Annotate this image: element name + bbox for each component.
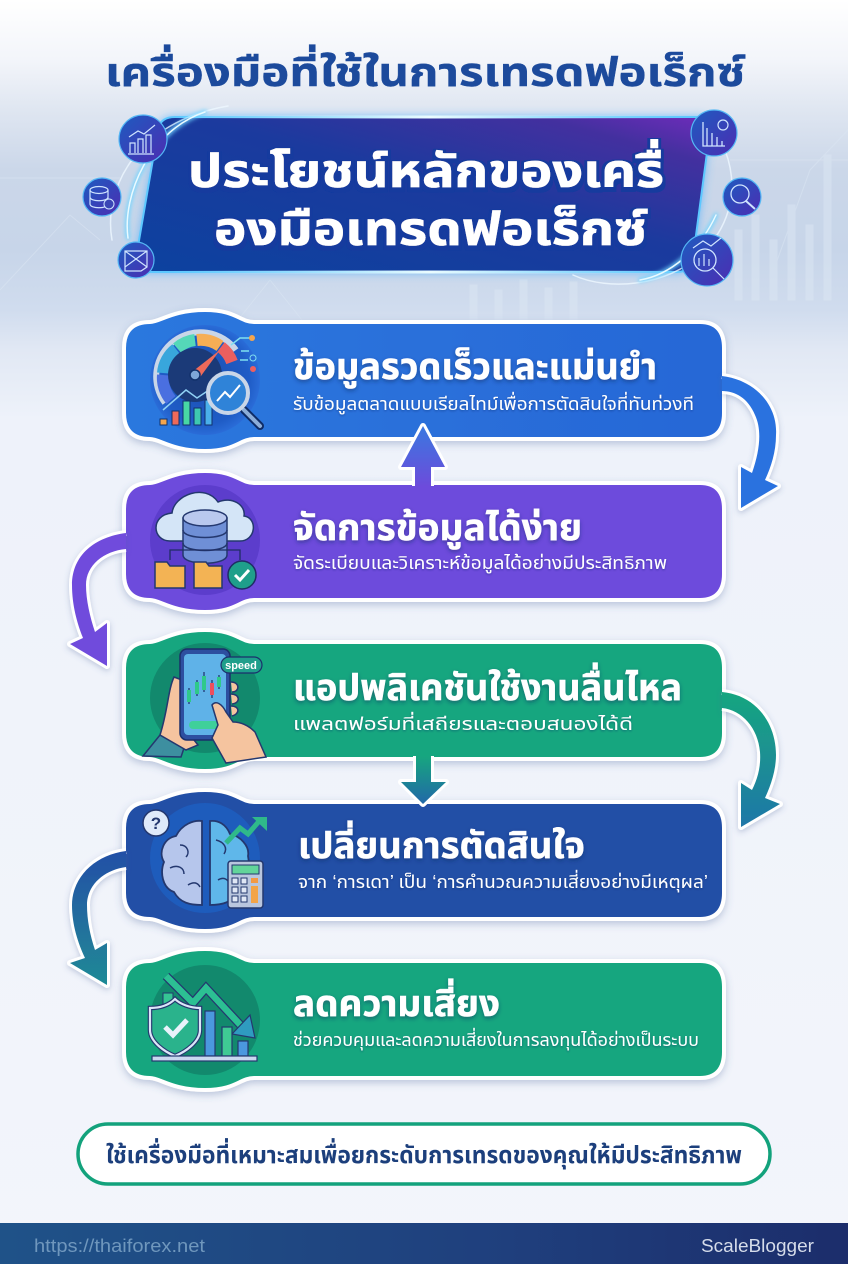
banner glow rings bbox=[111, 106, 732, 284]
banner heading line 2: องมือเทรดฟอเร็กซ์ bbox=[214, 203, 648, 255]
callout text: ใช้เครื่องมือที่เหมาะสมเพื่อยกระดับการเทรดของคุณให้มีประสิทธิภาพ bbox=[106, 1138, 742, 1170]
banner heading line 1: ประโยชน์หลักของเครื่ bbox=[188, 139, 664, 197]
footer url: https://thaiforex.net bbox=[34, 1236, 205, 1256]
card 4 heading: เปลี่ยนการตัดสินใจ bbox=[298, 820, 585, 866]
panel: card 5 reduce risk bbox=[124, 949, 724, 1090]
footer bar bbox=[0, 1223, 848, 1264]
card 5 heading: ลดความเสี่ยง bbox=[293, 978, 500, 1024]
question mark: ? bbox=[151, 814, 161, 833]
speed label: speed bbox=[225, 660, 257, 672]
title: เครื่องมือที่ใช้ในการเทรดฟอเร็กซ์ bbox=[105, 44, 746, 95]
banner bbox=[111, 106, 732, 284]
arrow: card 3 to card 4 bbox=[722, 692, 780, 827]
panel: card 3 smooth app bbox=[124, 630, 724, 771]
icon: phone with trading chart bbox=[143, 643, 266, 763]
card 1 heading: ข้อมูลรวดเร็วและแม่นยำ bbox=[293, 346, 657, 388]
callout pill bbox=[78, 1124, 770, 1184]
icon: gauge and magnifier bbox=[150, 325, 260, 435]
arrow: card 1 to card 2 bbox=[722, 376, 778, 508]
panel: card 2 data management bbox=[124, 471, 724, 612]
icon: growth chart badge bbox=[119, 115, 167, 163]
arrow: card 2 up to card 1 bbox=[401, 426, 445, 486]
arrow: card 3 down to card 4 bbox=[401, 756, 446, 804]
card 5 description: ช่วยควบคุมและลดความเสี่ยงในการลงทุนได้อย่างเป็นระบบ bbox=[293, 1027, 699, 1051]
icon: analysis badge bbox=[681, 234, 733, 286]
card 2 heading: จัดการข้อมูลได้ง่าย bbox=[293, 507, 582, 549]
card 1 description: รับข้อมูลตลาดแบบเรียลไทม์เพื่อการตัดสินใจที่ทันท่วงที bbox=[293, 391, 694, 416]
icon: chart envelope badge bbox=[118, 242, 154, 278]
icon: falling bars badge bbox=[691, 110, 737, 156]
icon: cloud database and folders bbox=[150, 485, 260, 595]
icon: shield and falling chart bbox=[150, 965, 260, 1075]
panel: card 1 speed and accuracy bbox=[124, 310, 724, 451]
arrow: card 4 to card 5 bbox=[70, 851, 126, 985]
icon: database badge bbox=[83, 178, 121, 216]
card 2 description: จัดระเบียบและวิเคราะห์ข้อมูลได้อย่างมีประสิทธิภาพ bbox=[293, 553, 667, 575]
icon: magnifier badge bbox=[723, 178, 761, 216]
icon: brain with calculator bbox=[143, 803, 267, 913]
card 4 description: จาก ‘การเดา’ เป็น ‘การคำนวณความเสี่ยงอย่างมีเหตุผล’ bbox=[298, 869, 708, 893]
panel: card 4 changing decisions bbox=[124, 790, 724, 931]
footer brand: ScaleBlogger bbox=[701, 1236, 814, 1256]
card 3 description: แพลตฟอร์มที่เสถียรและตอบสนองได้ดี bbox=[293, 711, 633, 734]
card 3 heading: แอปพลิเคชันใช้งานลื่นไหล bbox=[293, 662, 682, 708]
arrow: card 2 to card 3 bbox=[70, 533, 126, 666]
